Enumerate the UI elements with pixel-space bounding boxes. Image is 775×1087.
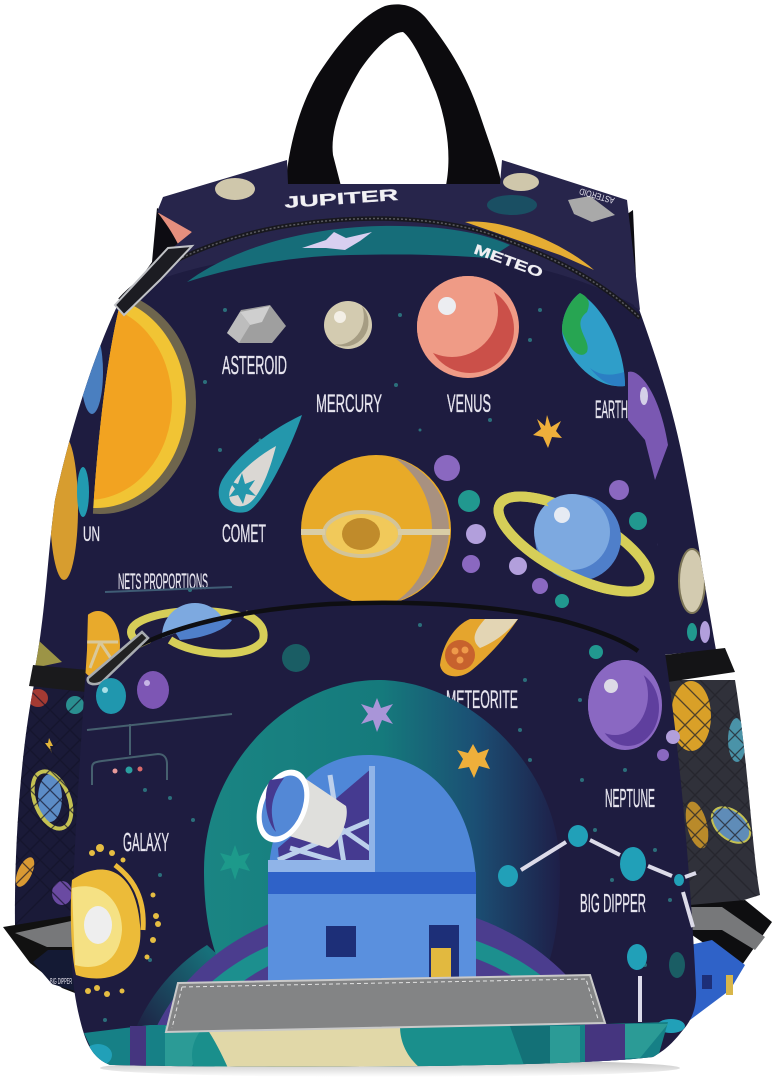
label: partial sun: UN: [83, 523, 100, 546]
window: [326, 926, 356, 957]
teal arc under zipper: [187, 226, 510, 282]
left reflective side strap: [3, 915, 80, 995]
backpack illustration: NETS PROPORTIONS: [118, 569, 208, 594]
panel: front body: [72, 250, 696, 1067]
backpack illustration: METEORITE: [446, 686, 518, 714]
icon: asteroid: [227, 305, 286, 343]
icon: venus: [417, 276, 519, 378]
icon: galaxy: [71, 844, 161, 997]
planet blob: [487, 195, 537, 215]
reflective patch: [166, 975, 605, 1032]
icon: side teal planet: [77, 467, 89, 517]
icon: observatory scene: [135, 680, 600, 1030]
icon: jupiter: [301, 455, 451, 605]
chart lines: small diagram: [87, 714, 232, 785]
label: venus: VENUS: [447, 390, 491, 418]
ground shadow: [100, 1059, 680, 1077]
icon: side uranus: [679, 549, 705, 613]
icon: sun: [92, 300, 196, 514]
backpack illustration: NEPTUNE: [605, 783, 655, 813]
icon: side blue arc: [83, 346, 103, 414]
chart: big dipper: [498, 825, 696, 1033]
icon: zipper pull lower: [88, 632, 148, 684]
elastic band: [29, 665, 88, 692]
icon: top mercury: [215, 178, 255, 200]
meteorite stripe: [465, 222, 594, 270]
icon: meteorite: [440, 619, 518, 676]
icon: rocket: [628, 372, 668, 480]
icon: purple planet: [137, 671, 169, 709]
pocket print: [12, 689, 84, 905]
zipper: pocket: [118, 603, 638, 657]
icon: left orange planet: [86, 611, 120, 676]
panel: front pocket: [118, 603, 638, 680]
panel: right mesh pocket: [665, 648, 760, 905]
building: [268, 755, 476, 980]
hill purple: [155, 902, 600, 1030]
icon: star teal: [220, 845, 250, 880]
icon: side planet: [50, 436, 78, 580]
hill deep: [192, 942, 565, 1030]
zipper: main: [120, 219, 640, 318]
building band: [268, 872, 476, 894]
left reflective side strap: BIG DIPPER: [50, 977, 72, 986]
icon: star lilac: [361, 698, 393, 732]
backpack illustration: GALAXY: [123, 827, 169, 857]
icon: small star: [533, 415, 562, 448]
label: mars: MARS: [640, 469, 654, 497]
icon: saturn: [494, 492, 654, 596]
icon: star gold: [457, 744, 490, 778]
lower wall: [268, 894, 476, 984]
label: jupiter: JUPITER: [284, 187, 400, 212]
icon: top asteroid: [568, 196, 615, 222]
elastic band: [664, 648, 735, 682]
panel: top flap: [125, 160, 640, 310]
icon: neptune: [588, 660, 680, 761]
dome: [204, 680, 560, 1010]
back wedges: [125, 208, 195, 300]
pocket print: [671, 681, 757, 851]
panel: bottom trim: [84, 1022, 668, 1068]
hill teal: [170, 925, 585, 1030]
star dots: [103, 308, 672, 1022]
backpack illustration: BIG DIPPER: [580, 888, 646, 918]
building shutter: [278, 768, 372, 872]
backpack illustration: EARTH: [595, 396, 628, 424]
panel: left mesh pocket: [14, 665, 86, 925]
icon: earth: [562, 293, 625, 386]
icon: small saturn: [118, 603, 330, 680]
right gusset: [634, 306, 716, 655]
icon: top right mercury: [503, 173, 539, 191]
icon: mercury: [324, 301, 372, 349]
icon: side olive: [36, 642, 62, 666]
icon: zipper pull upper: [115, 246, 192, 315]
planets group: [86, 300, 196, 676]
backpack illustration: COMET: [222, 520, 266, 548]
icon: flap side planet: [158, 212, 192, 244]
proportions rule: [105, 587, 232, 592]
label: meteorite top: METEO: [472, 241, 545, 280]
right reflective side strap: [690, 900, 772, 1020]
handle: [285, 4, 503, 190]
star on arc: [302, 232, 372, 250]
label: asteroid mirrored: ASTEROID: [578, 186, 616, 206]
backpack illustration: ASTEROID: [222, 350, 287, 380]
icon: comet: [219, 415, 302, 513]
icon: side dots: [658, 544, 710, 643]
icon: dark teal planet: [282, 644, 310, 672]
left gusset: [34, 296, 122, 672]
door: [429, 925, 459, 982]
label: mercury: MERCURY: [316, 390, 382, 418]
decorative planet dots: [434, 455, 647, 659]
outer glow: [135, 945, 300, 1030]
telescope: [270, 775, 347, 848]
icon: teal planet: [96, 678, 126, 714]
